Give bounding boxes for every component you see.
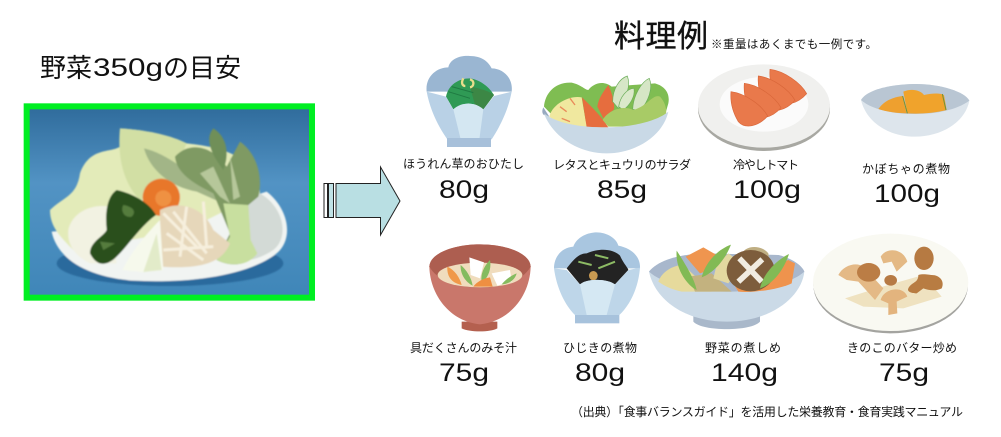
dish: sauteed mushrooms in butter [813,234,968,387]
note: weights are only an example: ※重量はあくまでも一例です。 [711,37,877,51]
title: vegetables 350g guide: 350g [93,54,163,82]
label: 野菜の煮しめ [705,341,781,355]
label: レタスとキュウリのサラダ [553,157,691,172]
weight: 85g [597,176,647,204]
weight: 75g [879,359,929,387]
title: vegetables 350g guide: 野菜 [40,53,92,83]
label: 具だくさんのみそ汁 [410,341,517,355]
weight: 140g [711,359,778,387]
dish: simmered vegetables [649,245,804,387]
dish: lettuce and cucumber salad [542,76,691,204]
weight: 100g [874,180,940,208]
photo: plate of vegetables with green frame [27,106,312,298]
title: vegetables 350g guide [40,53,241,83]
dish: simmered hijiki [554,232,640,387]
dish: spinach ohitashi [403,56,524,204]
dish: simmered pumpkin [861,84,969,208]
title: vegetables 350g guide: の目安 [163,53,241,83]
dish: chilled tomato [698,64,830,204]
label: 冷やしトマト [733,158,799,172]
source citation: （出典）「食事バランスガイド」を活用した栄養教育・食育実践マニュアル [571,404,963,419]
weight: 75g [439,359,489,387]
weight: 80g [575,359,625,387]
weight: 80g [439,176,489,204]
dish base [447,138,491,147]
label: ひじきの煮物 [563,341,637,355]
heading: cooking examples: 料理例 [614,19,708,54]
label: きのこのバター炒め [847,341,957,355]
block arrow pointing right [324,167,400,235]
weight: 100g [733,176,801,204]
label: かぼちゃの煮物 [862,162,950,176]
dish: miso soup with plenty of ingredients [410,244,531,387]
label: ほうれん草のおひたし [403,157,524,171]
